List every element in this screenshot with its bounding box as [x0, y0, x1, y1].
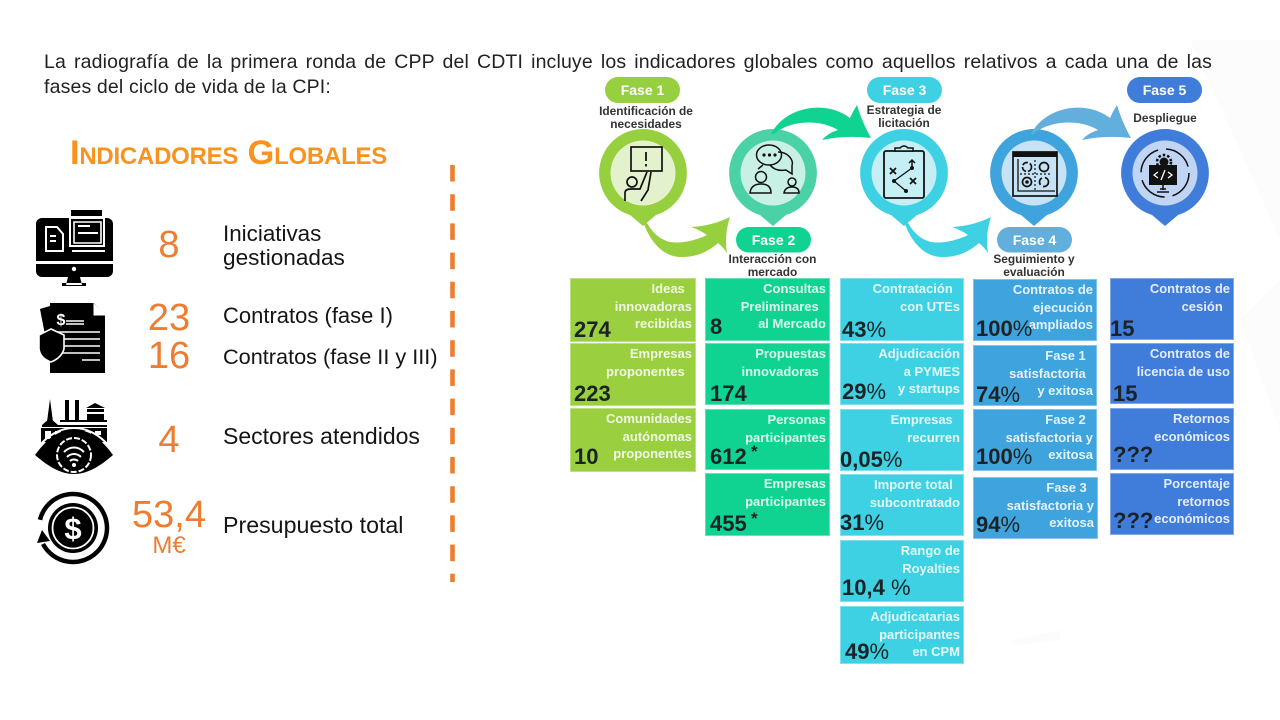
intro text: fases del ciclo de vida de la CPI: — [44, 76, 331, 98]
number: contracts phase I: 23 — [148, 297, 190, 339]
tile: economic returns: Retornos económicos — [1154, 411, 1230, 444]
tile: SME awards: 29% — [842, 379, 886, 404]
tile: participating companies: Empresas participantes — [745, 476, 826, 509]
panel: phase 5 indicators — [1110, 278, 1234, 535]
tile: participating companies: * — [751, 509, 758, 528]
phase 1: Identificación de — [599, 104, 693, 118]
tile: licence contracts: 15 — [1113, 381, 1137, 406]
arrow: phase 2 to 3 — [771, 105, 871, 140]
tile: participating people: Personas participantes — [745, 412, 826, 445]
phase 5 — [1121, 77, 1209, 226]
phase 3: Estrategia de — [867, 103, 942, 117]
arrow: phase 3 to 4 — [903, 217, 991, 257]
phase 4: Fase 4 — [1013, 232, 1057, 248]
tile: assignment contracts — [1110, 278, 1234, 340]
panel: phase 4 indicators — [973, 279, 1098, 539]
tile: subcontracted amount: 31% — [840, 510, 884, 535]
icon: contract with shield: $ — [57, 312, 66, 329]
tile: SME awards — [840, 343, 964, 405]
tile: participating companies — [705, 473, 830, 536]
tile: innovative proposals: Propuestas innovadoras — [741, 346, 826, 379]
title: Indicadores Globales — [70, 134, 387, 172]
panel: phase 2 indicators — [705, 278, 830, 536]
label: initiatives: gestionadas — [223, 245, 345, 270]
tile: assignment contracts: Contratos de cesión — [1150, 281, 1230, 314]
tile: economic returns: ??? — [1113, 442, 1153, 467]
tile: participating companies: 455 — [710, 511, 747, 536]
intro text — [44, 51, 1212, 98]
tile: royalties range: 10,4 % — [842, 575, 910, 600]
tile: phase 3 success — [973, 477, 1098, 539]
label: budget: Presupuesto total — [223, 512, 403, 538]
tile: proposing companies: 223 — [574, 381, 611, 406]
tile: ideas — [570, 278, 696, 342]
panel: phase 3 indicators — [840, 278, 964, 664]
tile: preliminary consultations: 8 — [710, 314, 722, 339]
phase 3 — [860, 77, 948, 226]
label: initiatives: Iniciativas — [223, 221, 321, 246]
tile: phase 3 success: 94% — [976, 512, 1020, 537]
tile: percentage of returns: Porcentaje retornos económicos — [1154, 476, 1230, 526]
tile: autonomous communities: Comunidades autónomas proponentes — [606, 411, 692, 461]
phase 2: mercado — [748, 265, 797, 279]
tile: extended contracts: 100% — [976, 316, 1032, 341]
phase 4: Seguimiento y — [993, 252, 1075, 266]
label: contracts phase II and III: Contratos (fase II y III) — [223, 344, 438, 369]
tile: percentage of returns — [1110, 473, 1234, 535]
tile: autonomous communities: 10 — [574, 444, 598, 469]
phase 4: evaluación — [1003, 265, 1065, 279]
phase 1 — [599, 77, 693, 226]
tile: ideas: Ideas innovadoras recibidas — [615, 281, 692, 331]
phase 5: Despliegue — [1133, 111, 1197, 125]
tile: ideas: 274 — [574, 317, 611, 342]
tile: phase 1 success: Fase 1 satisfactoria y exitosa — [1009, 348, 1093, 398]
tile: preliminary consultations — [705, 278, 830, 341]
tile: preliminary consultations: Consultas Preliminares al Mercado — [741, 281, 826, 331]
tile: assignment contracts: 15 — [1110, 316, 1134, 341]
intro text: La radiografía de la primera ronda de CPP del CDTI incluye los indicadores globales como aquellos relativos a cada una de las — [44, 51, 1212, 73]
tile: autonomous communities — [570, 408, 696, 472]
tile: licence contracts: Contratos de licencia de uso — [1137, 346, 1230, 379]
tile: subcontracted amount: Importe total subcontratado — [870, 477, 960, 510]
panel: global indicators — [35, 210, 438, 564]
tile: royalties range — [840, 540, 964, 602]
tile: innovative proposals: 174 — [710, 381, 747, 406]
phase diagram — [599, 77, 1209, 279]
phase 2: Interacción con — [729, 252, 816, 266]
number: contracts phase II and III: 16 — [148, 335, 190, 377]
number: initiatives: 8 — [158, 224, 180, 266]
tile: awardees in CPM: Adjudicatarias participantes en CPM — [870, 609, 960, 659]
tile: participating people: 612 — [710, 444, 747, 469]
number: sectors: 4 — [158, 419, 180, 461]
tile: extended contracts: Contratos de ejecución ampliados — [1013, 282, 1093, 332]
tile: awardees in CPM — [840, 606, 964, 664]
arrow: phase 4 to 5 — [1031, 105, 1131, 140]
tile: licence contracts — [1110, 343, 1234, 404]
tile: economic returns — [1110, 408, 1234, 470]
tile: phase 1 success — [973, 345, 1097, 406]
tile: recurring companies — [840, 409, 964, 471]
phase 5: Fase 5 — [1143, 82, 1187, 98]
phase 1: Fase 1 — [621, 82, 665, 98]
icon: contract with shield — [40, 303, 105, 373]
icon: dollar coin with arrow — [37, 492, 110, 564]
phase 2 — [729, 129, 817, 279]
tile: extended contracts — [973, 279, 1097, 341]
unit: million euros: M€ — [152, 532, 186, 559]
tile: proposing companies: Empresas proponentes — [606, 346, 692, 379]
icon: city and eye — [35, 399, 113, 474]
tile: phase 1 success: 74% — [976, 382, 1020, 407]
tile: phase 2 success: 100% — [976, 444, 1032, 469]
phase 4 — [990, 129, 1078, 279]
tile: phase 2 success: Fase 2 satisfactoria y exitosa — [1006, 412, 1093, 462]
tile: joint ventures — [840, 278, 964, 341]
tile: joint ventures: 43% — [842, 317, 886, 342]
tile: royalties range: Rango de Royalties — [901, 543, 960, 576]
number: budget: 53,4 — [132, 494, 206, 536]
tile: phase 3 success: Fase 3 satisfactoria y exitosa — [1007, 480, 1094, 530]
tile: SME awards: Adjudicación a PYMES y startups — [878, 346, 960, 396]
arrow: phase 1 to 2 — [642, 217, 730, 257]
tile: awardees in CPM: 49% — [845, 639, 889, 664]
tile: participating people: * — [751, 442, 758, 461]
tile: phase 2 success — [973, 409, 1097, 471]
tile: subcontracted amount — [840, 474, 964, 536]
icon: monitor with documents — [36, 210, 113, 286]
tile: proposing companies — [570, 343, 696, 406]
dashed divider — [450, 165, 455, 582]
phase 2: Fase 2 — [752, 232, 796, 248]
phase 3: licitación — [878, 116, 930, 130]
tile: innovative proposals — [705, 343, 830, 405]
tile: joint ventures: Contratación con UTEs — [873, 281, 960, 314]
icon: dollar coin with arrow: $ — [64, 511, 82, 546]
label: sectors: Sectores atendidos — [223, 423, 420, 449]
tile: participating people — [705, 409, 830, 470]
tile: recurring companies: Empresas recurren — [891, 412, 960, 445]
tile: percentage of returns: ??? — [1113, 508, 1153, 533]
phase 3: Fase 3 — [883, 82, 927, 98]
label: initiatives — [223, 221, 345, 270]
label: contracts phase I: Contratos (fase I) — [223, 303, 393, 328]
tile: recurring companies: 0,05% — [840, 447, 902, 472]
panel: phase 1 indicators — [570, 278, 696, 472]
phase 1: necesidades — [610, 117, 682, 131]
